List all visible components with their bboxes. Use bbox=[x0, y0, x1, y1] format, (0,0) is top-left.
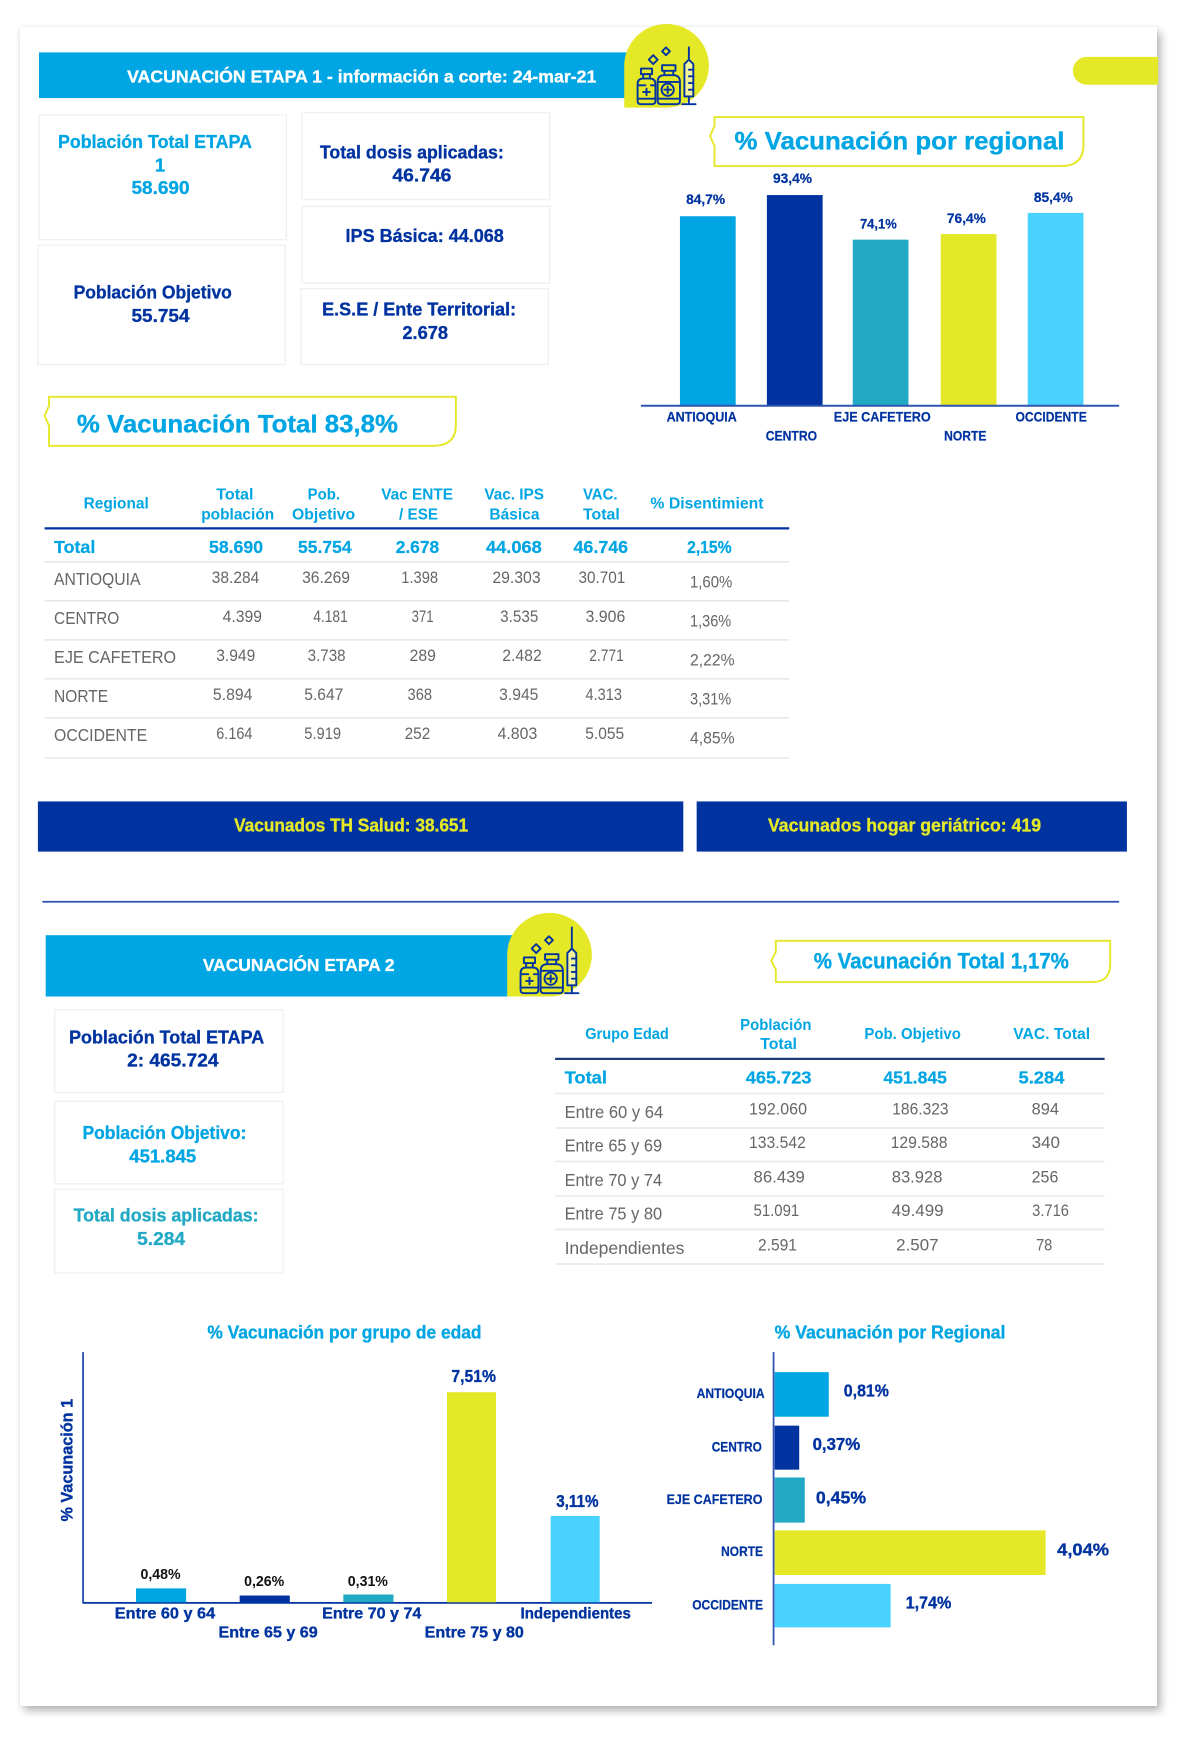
table total row bbox=[565, 1067, 1065, 1087]
chart title: % Vacunación por Regional bbox=[775, 1322, 1005, 1343]
row: Occidente: 252 bbox=[405, 725, 430, 743]
row: entre 70 y 74: 83.928 bbox=[892, 1169, 942, 1187]
table header row: Total bbox=[760, 1036, 797, 1053]
heading: etapa 2 banner bbox=[46, 935, 514, 997]
table header row: VAC. Total bbox=[1013, 1026, 1090, 1043]
bar chart: vacunación por regional etapa 2: ANTIOQUIA bbox=[697, 1385, 765, 1401]
row: Occidente: 4.803 bbox=[498, 725, 537, 743]
panel: IPS básica: IPS Básica: 44.068 bbox=[346, 225, 504, 246]
row: entre 75 y 80: Entre 75 y 80 bbox=[565, 1203, 662, 1223]
bar chart: vacunación por regional etapa 1: OCCIDENTE bbox=[1015, 408, 1087, 424]
row: Centro: 4.181 bbox=[313, 608, 348, 626]
row: entre 60 y 64 bbox=[565, 1101, 1059, 1122]
row: independientes bbox=[565, 1237, 1052, 1258]
row: Centro: 371 bbox=[412, 608, 434, 626]
row: entre 70 y 74 bbox=[565, 1169, 1058, 1190]
bar chart: vacunación por regional etapa 2: 1,74% bbox=[906, 1592, 951, 1612]
banner: vacunados TH salud bbox=[38, 801, 683, 852]
row: Eje Cafetero: 2,22% bbox=[690, 651, 735, 669]
bar chart: vacunación por regional etapa 1: 84,7% bbox=[686, 191, 726, 207]
callout: vacunación por regional bbox=[710, 117, 1083, 166]
icon: vaccine vials and syringe, etapa 2 bbox=[507, 913, 592, 997]
callout: vacunación total 83,8% bbox=[45, 397, 456, 446]
row: Antioquia bbox=[54, 569, 732, 591]
bar chart: vacunación por regional etapa 2: OCCIDENTE bbox=[692, 1597, 763, 1613]
table: vacunación por grupo de edad etapa 2 bbox=[555, 1017, 1105, 1264]
bar chart: vacunación por grupo de edad: 7,51% bbox=[451, 1366, 496, 1386]
panel: ESE / ente territorial: E.S.E / Ente Territorial: bbox=[322, 298, 516, 319]
panel: población objetivo etapa 2 bbox=[55, 1101, 283, 1184]
row: Eje Cafetero: 3.738 bbox=[308, 647, 346, 665]
row: Eje Cafetero bbox=[54, 647, 735, 669]
bar chart: vacunación por grupo de edad bbox=[58, 1322, 652, 1641]
heading: etapa 1 banner: VACUNACIÓN ETAPA 1 - información a corte: 24-mar-21 bbox=[127, 65, 596, 86]
table header row: Total bbox=[216, 486, 253, 503]
panel: población objetivo etapa 1 bbox=[38, 245, 285, 364]
row: Centro: 3.535 bbox=[500, 608, 538, 626]
panel: población objetivo etapa 1: 55.754 bbox=[132, 305, 190, 326]
table total row: 451.845 bbox=[883, 1067, 947, 1087]
row: Centro: 3.906 bbox=[586, 608, 625, 626]
row: Eje Cafetero: 2.482 bbox=[502, 647, 542, 665]
bar chart: vacunación por grupo de edad: 0,31% bbox=[348, 1574, 388, 1590]
bar chart: vacunación por regional etapa 2: 4,04% bbox=[1057, 1540, 1109, 1560]
bar chart: vacunación por regional etapa 1: NORTE bbox=[944, 427, 986, 443]
bar chart: vacunación por regional etapa 2 bbox=[667, 1322, 1109, 1645]
table total row: 5.284 bbox=[1018, 1067, 1065, 1087]
panel: total dosis aplicadas: Total dosis aplicadas: bbox=[320, 141, 504, 162]
row: entre 70 y 74: Entre 70 y 74 bbox=[565, 1170, 662, 1190]
bar chart: vacunación por regional etapa 1: 76,4% bbox=[947, 210, 987, 226]
bar chart: vacunación por regional etapa 2: NORTE bbox=[721, 1543, 763, 1559]
row: Norte: 5.894 bbox=[213, 686, 252, 704]
row: entre 65 y 69: 133.542 bbox=[749, 1134, 806, 1152]
bar chart: vacunación por regional etapa 2: 0,81% bbox=[844, 1381, 889, 1401]
row: entre 60 y 64: 894 bbox=[1032, 1101, 1059, 1119]
bar chart: vacunación por grupo de edad: 3,11% bbox=[556, 1491, 599, 1511]
callout: vacunación total 1,17% bbox=[771, 941, 1110, 982]
row: Occidente: 6.164 bbox=[216, 725, 252, 743]
row: entre 70 y 74: 86.439 bbox=[754, 1169, 805, 1187]
row: entre 70 y 74: 256 bbox=[1032, 1169, 1058, 1187]
row: Occidente: 5.055 bbox=[585, 725, 624, 743]
table total row: 44.068 bbox=[486, 537, 542, 557]
bar chart: vacunación por regional etapa 1: EJE CAFETERO bbox=[834, 408, 931, 424]
table total row bbox=[54, 537, 732, 557]
panel: población objetivo etapa 1: Población Objetivo bbox=[74, 282, 232, 303]
row: Centro bbox=[54, 608, 731, 630]
table header row bbox=[585, 1017, 1090, 1053]
table total row: Total bbox=[565, 1067, 607, 1087]
row: entre 65 y 69: Entre 65 y 69 bbox=[565, 1135, 662, 1155]
table header row: Vac. IPS bbox=[484, 486, 544, 503]
row: independientes: 2.591 bbox=[758, 1237, 797, 1255]
panel: población total etapa 2: Población Total ETAPA bbox=[69, 1026, 264, 1047]
row: Antioquia: 36.269 bbox=[302, 569, 350, 587]
row: Norte: 5.647 bbox=[304, 686, 343, 704]
bar chart: vacunación por regional etapa 1: 93,4% bbox=[773, 170, 813, 186]
table header row: Básica bbox=[489, 506, 540, 523]
panel: IPS básica bbox=[302, 206, 550, 283]
table total row: Total bbox=[54, 537, 95, 557]
decorative tab: yellow pill bbox=[1073, 57, 1158, 85]
table header row: % Disentimient bbox=[650, 495, 764, 512]
panel: total dosis aplicadas etapa 2: 5.284 bbox=[137, 1228, 186, 1249]
panel: población total etapa 2: 2: 465.724 bbox=[127, 1050, 219, 1071]
bar chart: vacunación por regional etapa 1: 74,1% bbox=[860, 216, 897, 232]
panel: total dosis aplicadas: 46.746 bbox=[392, 165, 451, 186]
row: Occidente: 5.919 bbox=[304, 725, 341, 743]
banner: vacunados hogar geriátrico: Vacunados hogar geriátrico: 419 bbox=[768, 815, 1041, 836]
table header row: Total bbox=[583, 506, 620, 523]
table header row: Pob. bbox=[308, 486, 340, 503]
row: entre 60 y 64: 192.060 bbox=[749, 1101, 807, 1119]
callout: vacunación total 1,17%: % Vacunación Total 1,17% bbox=[814, 949, 1069, 974]
table header row: Objetivo bbox=[292, 506, 355, 523]
row: entre 65 y 69: 129.588 bbox=[891, 1134, 947, 1152]
bar chart: vacunación por regional etapa 1 bbox=[641, 170, 1119, 443]
bar chart: vacunación por grupo de edad: 0,26% bbox=[244, 1574, 284, 1590]
table total row: 465.723 bbox=[746, 1067, 811, 1087]
callout: vacunación total 83,8%: % Vacunación Total 83,8% bbox=[77, 411, 398, 438]
row: Eje Cafetero: 2.771 bbox=[589, 647, 624, 665]
bar chart: vacunación por regional etapa 1: 85,4% bbox=[1034, 189, 1073, 205]
row: Eje Cafetero: 3.949 bbox=[216, 647, 255, 665]
row: Norte: 3,31% bbox=[690, 690, 731, 708]
row: Norte: NORTE bbox=[54, 686, 108, 706]
table header row: Grupo Edad bbox=[585, 1026, 669, 1043]
callout: vacunación por regional: % Vacunación por regional bbox=[735, 128, 1065, 155]
row: independientes: Independientes bbox=[565, 1238, 685, 1258]
bar chart: vacunación por grupo de edad: Entre 60 y 64 bbox=[115, 1605, 215, 1622]
table header row: Regional bbox=[84, 495, 149, 512]
heading: etapa 1 banner bbox=[39, 52, 630, 98]
row: Antioquia: 1.398 bbox=[401, 569, 438, 587]
panel: total dosis aplicadas etapa 2: Total dosis aplicadas: bbox=[74, 1205, 259, 1226]
table header row: VAC. bbox=[583, 486, 618, 503]
row: entre 65 y 69 bbox=[565, 1134, 1060, 1155]
row: Centro: CENTRO bbox=[54, 608, 119, 628]
bar chart: vacunación por regional etapa 2: CENTRO bbox=[712, 1438, 762, 1454]
table header row: Vac ENTE bbox=[381, 486, 453, 503]
row: Eje Cafetero: 289 bbox=[410, 647, 436, 665]
bar chart: vacunación por grupo de edad: Entre 75 y 80 bbox=[425, 1624, 524, 1641]
heading: etapa 2 banner: VACUNACIÓN ETAPA 2 bbox=[203, 954, 395, 975]
row: entre 75 y 80: 3.716 bbox=[1032, 1202, 1069, 1220]
row: Antioquia: 1,60% bbox=[690, 573, 732, 591]
row: Norte: 368 bbox=[408, 686, 432, 704]
bar chart: vacunación por grupo de edad: Independientes bbox=[521, 1605, 631, 1622]
panel: población objetivo etapa 2: 451.845 bbox=[129, 1146, 196, 1167]
row: Antioquia: ANTIOQUIA bbox=[54, 569, 141, 589]
panel: ESE / ente territorial bbox=[301, 289, 548, 364]
panel: población total etapa 1: 58.690 bbox=[132, 177, 189, 198]
bar chart: vacunación por grupo de edad: Entre 65 y 69 bbox=[218, 1624, 318, 1641]
row: entre 60 y 64: Entre 60 y 64 bbox=[565, 1102, 664, 1122]
row: Occidente bbox=[54, 725, 735, 747]
panel: población total etapa 1: 1 bbox=[155, 155, 165, 176]
row: Antioquia: 30.701 bbox=[579, 569, 625, 587]
row: entre 65 y 69: 340 bbox=[1032, 1134, 1060, 1152]
row: Eje Cafetero: EJE CAFETERO bbox=[54, 647, 176, 667]
row: independientes: 78 bbox=[1036, 1237, 1052, 1255]
row: independientes: 2.507 bbox=[896, 1237, 939, 1255]
bar chart: vacunación por regional etapa 2: 0,45% bbox=[816, 1488, 866, 1508]
table total row: 55.754 bbox=[298, 537, 352, 557]
table header row: / ESE bbox=[399, 506, 438, 523]
panel: población total etapa 1 bbox=[39, 115, 286, 240]
panel: ESE / ente territorial: 2.678 bbox=[402, 322, 448, 343]
y axis label: % Vacunación 1 bbox=[58, 1399, 76, 1522]
table total row: 58.690 bbox=[209, 537, 263, 557]
row: Centro: 4.399 bbox=[223, 608, 262, 626]
row: Occidente: 4,85% bbox=[690, 729, 735, 747]
bar chart: vacunación por grupo de edad: 0,48% bbox=[140, 1567, 181, 1583]
panel: población total etapa 2 bbox=[55, 1010, 283, 1092]
row: entre 75 y 80 bbox=[565, 1202, 1069, 1223]
table total row: 2.678 bbox=[396, 537, 440, 557]
row: Norte bbox=[54, 686, 731, 708]
panel: total dosis aplicadas etapa 2 bbox=[55, 1189, 283, 1273]
table header row bbox=[84, 486, 764, 523]
bar chart: vacunación por grupo de edad: Entre 70 y 74 bbox=[322, 1605, 422, 1622]
row: Centro: 1,36% bbox=[690, 612, 731, 630]
row: Norte: 4.313 bbox=[586, 686, 622, 704]
panel: población total etapa 1: Población Total ETAPA bbox=[58, 131, 252, 152]
table total row: 2,15% bbox=[687, 537, 732, 557]
table header row: Población bbox=[740, 1017, 811, 1034]
panel: total dosis aplicadas bbox=[302, 113, 550, 200]
bar chart: vacunación por regional etapa 2: EJE CAFETERO bbox=[667, 1491, 763, 1507]
table total row: 46.746 bbox=[573, 537, 628, 557]
row: entre 60 y 64: 186.323 bbox=[892, 1101, 949, 1119]
chart title: % Vacunación por grupo de edad bbox=[207, 1322, 482, 1343]
banner: vacunados TH salud: Vacunados TH Salud: 38.651 bbox=[234, 815, 468, 836]
panel: población objetivo etapa 2: Población Objetivo: bbox=[82, 1122, 246, 1143]
bar chart: vacunación por regional etapa 1: ANTIOQUIA bbox=[667, 408, 737, 424]
row: Antioquia: 29.303 bbox=[492, 569, 541, 587]
banner: vacunados hogar geriátrico bbox=[697, 801, 1127, 852]
bar chart: vacunación por regional etapa 2: 0,37% bbox=[813, 1434, 860, 1454]
table header row: población bbox=[201, 506, 274, 523]
table: vacunación por regional etapa 1 bbox=[45, 486, 789, 758]
icon: vaccine vials and syringe, etapa 1 bbox=[624, 24, 709, 108]
row: entre 75 y 80: 49.499 bbox=[892, 1202, 944, 1220]
table header row: Pob. Objetivo bbox=[864, 1026, 961, 1043]
row: Occidente: OCCIDENTE bbox=[54, 725, 147, 745]
row: Norte: 3.945 bbox=[499, 686, 538, 704]
row: entre 75 y 80: 51.091 bbox=[754, 1202, 799, 1220]
row: Antioquia: 38.284 bbox=[212, 569, 259, 587]
bar chart: vacunación por regional etapa 1: CENTRO bbox=[766, 427, 817, 443]
